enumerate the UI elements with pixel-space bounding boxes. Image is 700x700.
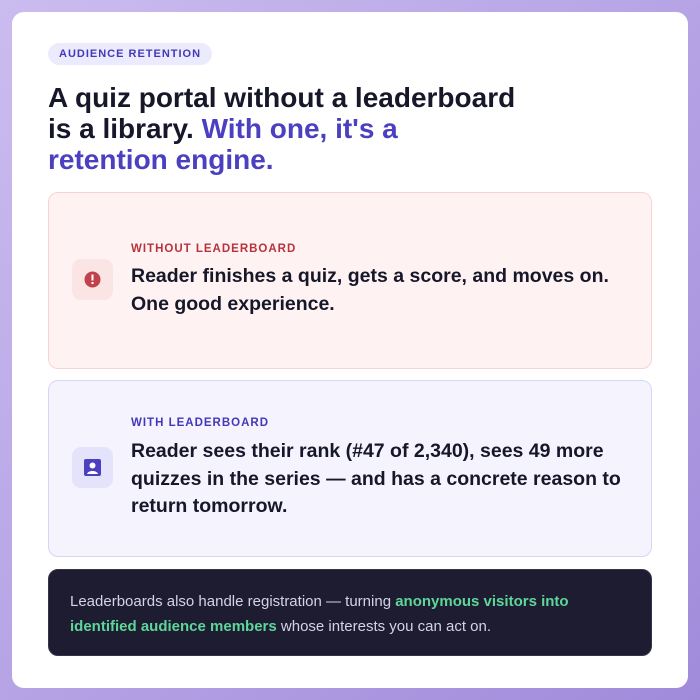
text: Reader sees their rank (#47 of 2,340), sees 49 more quizzes in the series — and has a concrete reason to return tomorrow. (131, 440, 621, 517)
pill: audience retention (48, 43, 212, 65)
title: A quiz portal without a leaderboard is a library. With one, it's a retention engine. (48, 82, 515, 175)
panel: without leaderboard (48, 192, 652, 369)
label: WITHOUT LEADERBOARD (131, 243, 296, 255)
pill: audience retention: AUDIENCE RETENTION (59, 48, 201, 60)
callout: dark (48, 569, 652, 656)
label: WITH LEADERBOARD (131, 417, 269, 429)
icon: user badge (72, 447, 113, 488)
callout: dark: Leaderboards also handle registration — turning anonymous visitors into identified audience members whose interests you can act on. (70, 593, 569, 635)
text: Reader finishes a quiz, gets a score, and moves on. One good experience. (131, 265, 609, 314)
panel: with leaderboard (48, 380, 652, 557)
icon: alert (72, 259, 113, 300)
